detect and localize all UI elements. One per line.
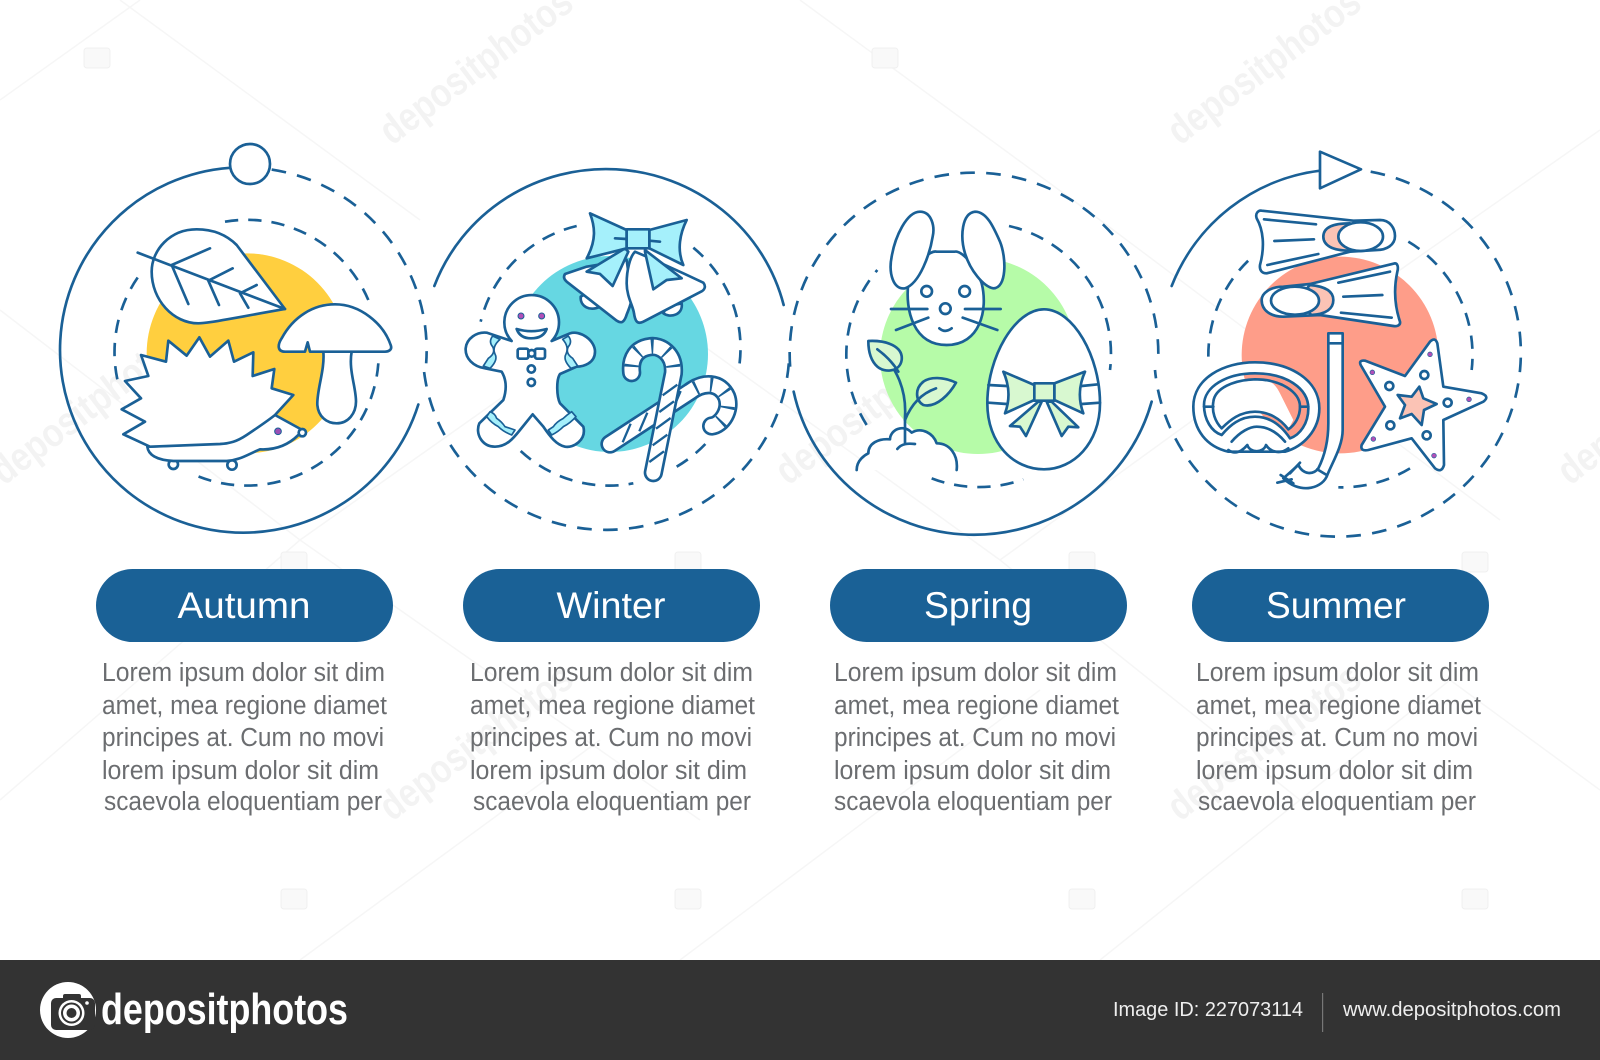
logo wordmark: depositphotos [101, 985, 348, 1034]
circle marker [230, 144, 270, 184]
panel: autumn illustration [60, 144, 427, 533]
text block: Summer description: lorem ipsum dolor sit dim [1196, 757, 1473, 785]
website url: www.depositphotos.com [1342, 999, 1561, 1021]
panel: summer illustration [1155, 152, 1521, 537]
heading pill: Autumn [96, 569, 393, 642]
heading pill: Summer: Summer [1266, 585, 1406, 626]
heading pill: Winter: Winter [556, 585, 666, 626]
text block: Winter description: amet, mea regione diamet [470, 692, 755, 720]
heading pill: Autumn: Autumn [178, 585, 310, 626]
icon: flippers [1256, 211, 1400, 326]
watermark pattern: depositphotos [1159, 656, 1369, 829]
text block: Spring description: Lorem ipsum dolor sit dim [834, 659, 1117, 687]
heading pill: Spring [830, 569, 1127, 642]
icon: gingerbread man [466, 295, 595, 447]
autumn orbit rings [60, 168, 427, 533]
spring orbit rings [790, 173, 1158, 535]
panel: spring illustration [790, 173, 1158, 535]
spring colour disc [880, 258, 1076, 454]
footer bar [0, 960, 1600, 1060]
text block: Spring description [834, 659, 1119, 816]
autumn colour disc [147, 253, 347, 453]
text block: Summer description [1196, 659, 1481, 816]
text block: Autumn description: amet, mea regione diamet [102, 692, 387, 720]
text block: Autumn description [102, 659, 387, 816]
text block: Summer description: principes at. Cum no movi [1196, 724, 1478, 752]
text block: Autumn description: Lorem ipsum dolor sit dim [102, 659, 385, 687]
text block: Winter description: principes at. Cum no movi [470, 724, 752, 752]
icon: sprout [857, 341, 957, 470]
text block: Spring description: scaevola eloquentiam per [834, 788, 1112, 816]
winter colour disc [512, 256, 708, 452]
icon: candy canes [610, 346, 728, 473]
icon: camera logo [40, 982, 96, 1038]
text block: Winter description: lorem ipsum dolor sit dim [470, 757, 747, 785]
text block: Autumn description: scaevola eloquentiam per [104, 788, 382, 816]
panel: winter illustration [423, 169, 789, 530]
icon: hedgehog [122, 337, 306, 470]
text block: Autumn description: principes at. Cum no movi [102, 724, 384, 752]
text block: Summer description: amet, mea regione diamet [1196, 692, 1481, 720]
text block: Summer description: scaevola eloquentiam per [1198, 788, 1476, 816]
text block: Spring description: amet, mea regione diamet [834, 692, 1119, 720]
icon: bells with bow [564, 213, 705, 323]
watermark pattern: depositphotos [767, 320, 977, 493]
icon: rabbit [891, 212, 1004, 345]
text block: Winter description: scaevola eloquentiam per [473, 788, 751, 816]
heading pill: Spring: Spring [924, 585, 1032, 626]
heading pill: Winter [463, 569, 760, 642]
icon: mushroom [279, 304, 391, 423]
text block: Summer description: Lorem ipsum dolor sit dim [1196, 659, 1479, 687]
watermark pattern: depositphotos [371, 656, 581, 829]
summer orbit rings [1155, 171, 1521, 537]
icon: diving mask [1192, 361, 1321, 454]
icon: leaf [138, 229, 285, 323]
text block: Winter description: Lorem ipsum dolor sit dim [470, 659, 753, 687]
icon: starfish [1360, 340, 1486, 470]
text block: Autumn description: lorem ipsum dolor sit dim [102, 757, 379, 785]
arrow marker [1320, 152, 1361, 188]
summer colour disc [1242, 257, 1438, 453]
image id: Image ID: 227073114 [1113, 999, 1303, 1021]
text block: Winter description [470, 659, 755, 816]
icon: easter egg [987, 309, 1100, 469]
text block: Spring description: principes at. Cum no movi [834, 724, 1116, 752]
heading pill: Summer [1192, 569, 1489, 642]
text block: Spring description: lorem ipsum dolor sit dim [834, 757, 1111, 785]
icon: snorkel [1277, 333, 1343, 488]
winter orbit rings [423, 169, 789, 530]
